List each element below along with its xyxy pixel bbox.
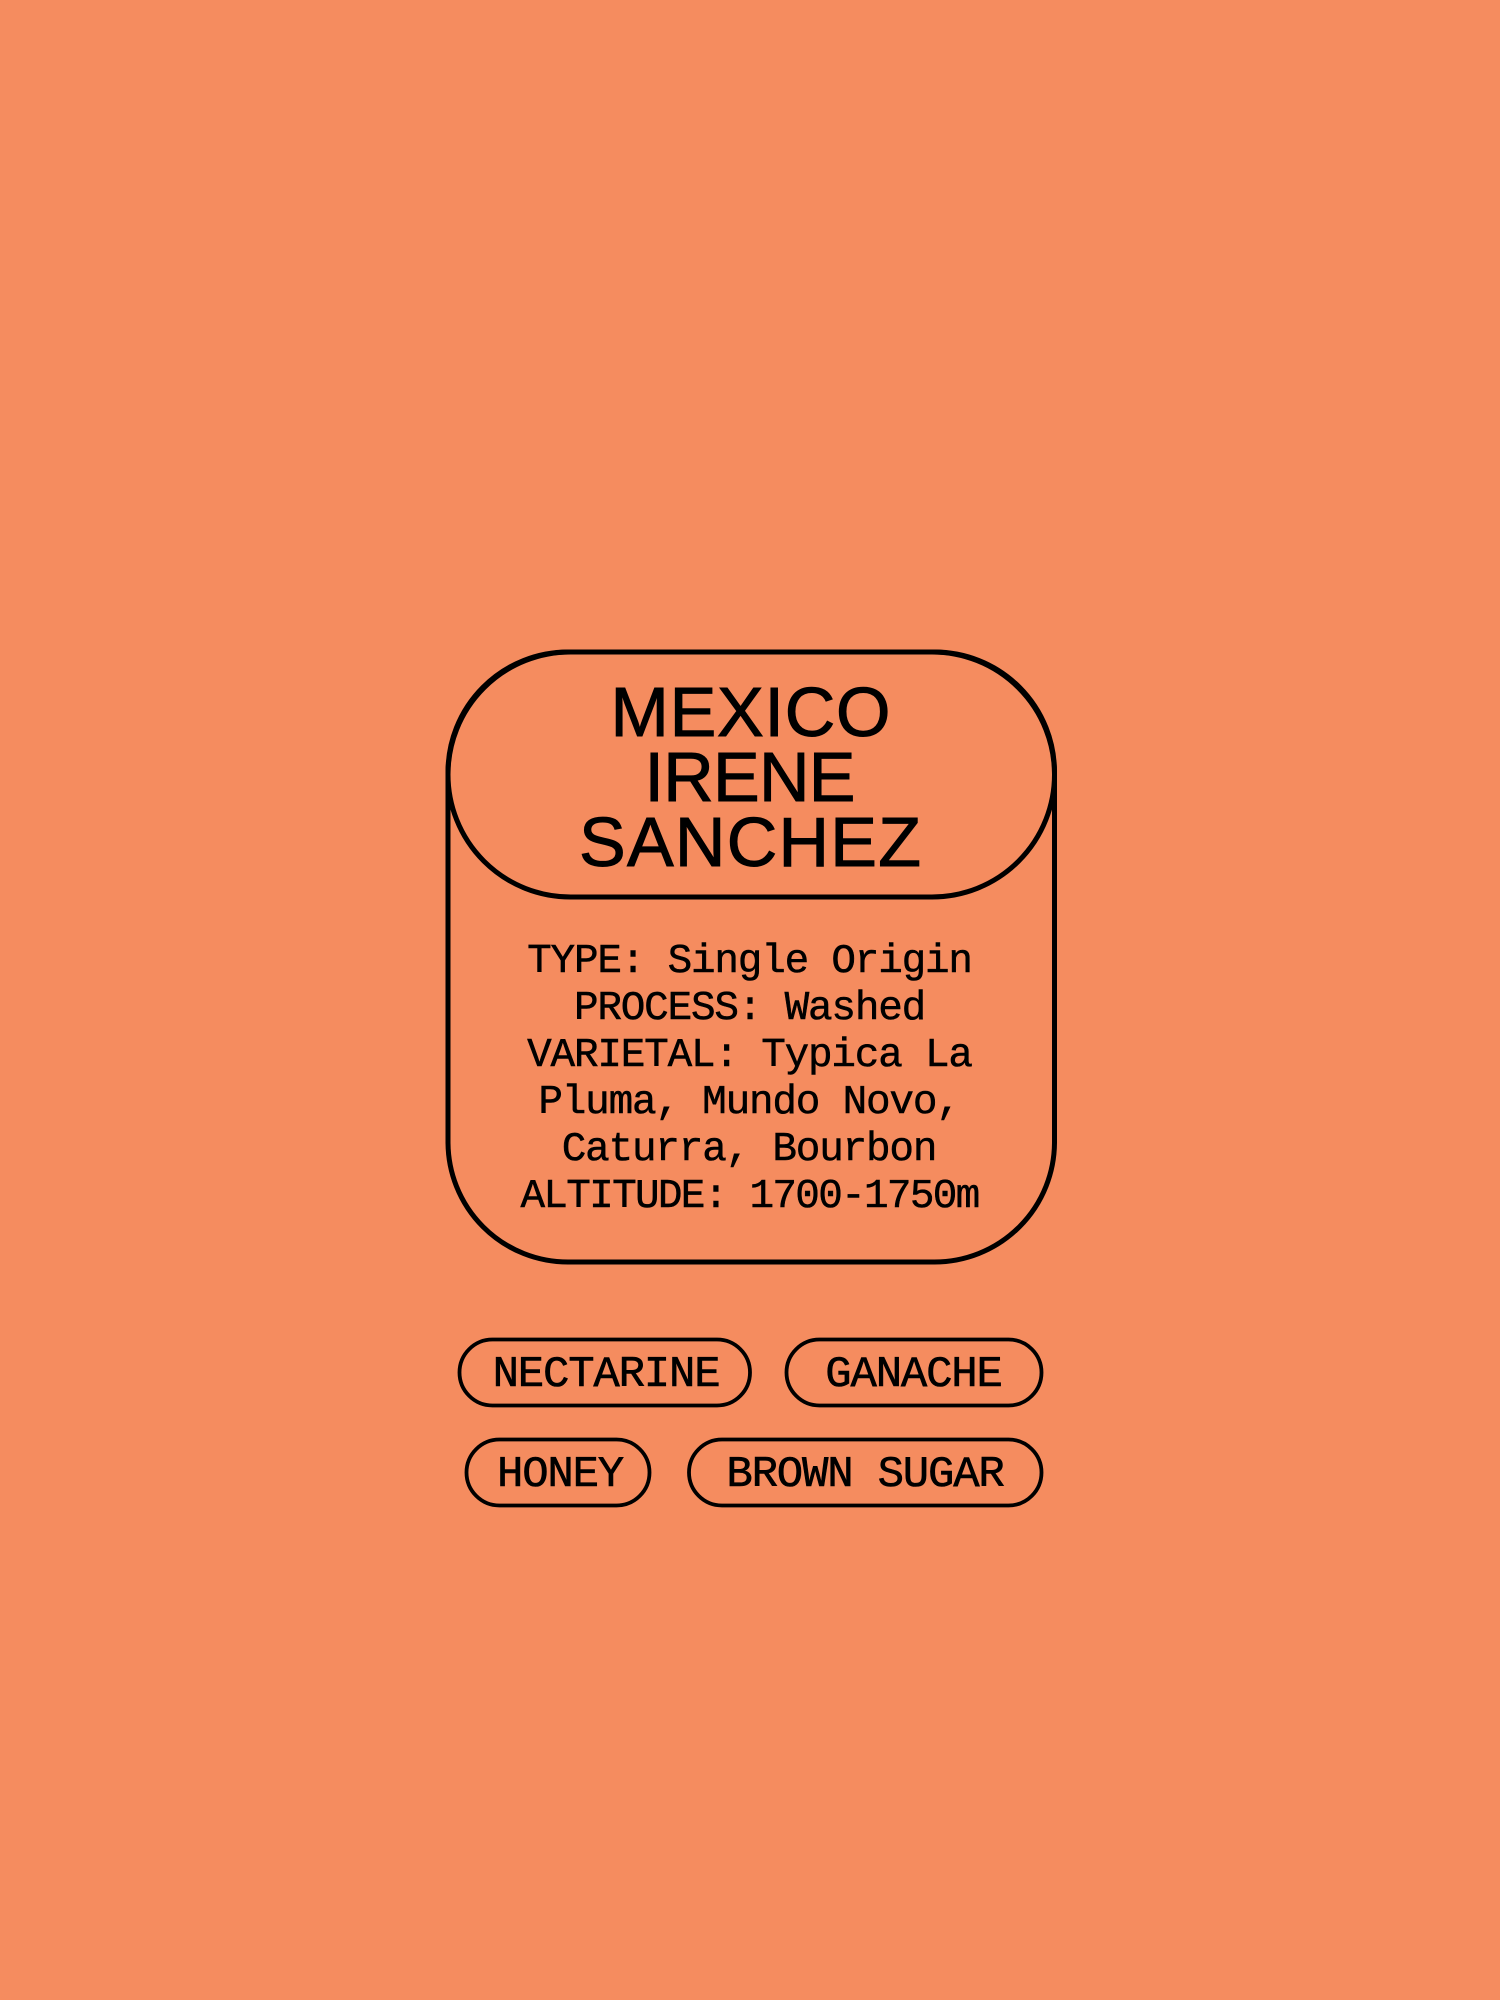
flavor tags [460, 1340, 1042, 1506]
coffee details text: PROCESS: Washed [574, 986, 925, 1032]
tag: brown sugar [689, 1440, 1042, 1506]
coffee details text: Pluma, Mundo Novo, [538, 1080, 960, 1126]
tag: nectarine: NECTARINE [493, 1350, 719, 1400]
tag: honey: HONEY [497, 1450, 624, 1500]
coffee details text: VARIETAL: Typica La [527, 1033, 972, 1079]
coffee details text: TYPE: Single Origin [527, 939, 972, 985]
title: SANCHEZ [579, 803, 921, 881]
title [579, 673, 921, 881]
tag: ganache [786, 1340, 1042, 1406]
title: MEXICO [610, 673, 890, 751]
tag: honey [466, 1440, 650, 1506]
coffee details text [520, 939, 979, 1220]
tag: brown sugar: BROWN SUGAR [726, 1450, 1004, 1500]
coffee details text: ALTITUDE: 1700-1750m [520, 1174, 979, 1220]
tag: nectarine [460, 1340, 750, 1406]
tag: ganache: GANACHE [825, 1350, 1002, 1400]
title: IRENE [644, 738, 856, 816]
coffee details text: Caturra, Bourbon [562, 1127, 936, 1173]
outer rounded frame [448, 652, 1054, 1262]
panel: coffee label [448, 652, 1054, 1262]
title pill [448, 652, 1054, 897]
